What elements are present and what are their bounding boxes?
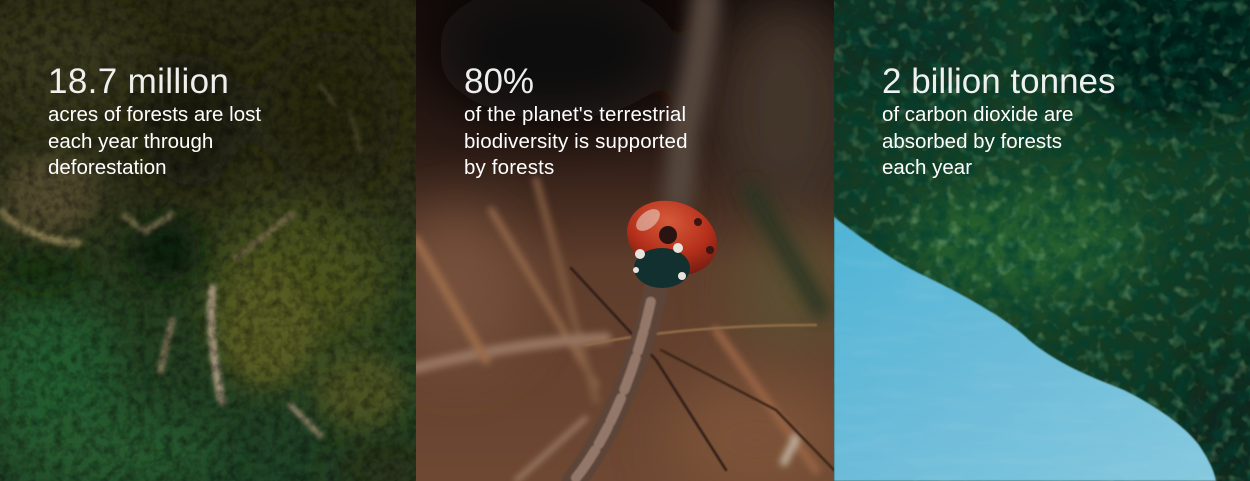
stat text: 18.7 million xyxy=(48,62,261,179)
panel: biodiversity xyxy=(416,0,834,481)
stat caption: of carbon dioxide are xyxy=(882,103,1073,126)
stat caption: biodiversity is supported xyxy=(464,130,688,152)
stat caption xyxy=(464,103,688,179)
stat caption: absorbed by forests xyxy=(882,130,1062,152)
icon: ladybird xyxy=(616,188,728,288)
photo: forest and lake xyxy=(834,0,1250,481)
panel: carbon xyxy=(834,0,1250,481)
stat caption: by forests xyxy=(464,156,554,179)
stat number: 2 billion tonnes xyxy=(882,62,1116,101)
stat number: 18.7 million xyxy=(48,62,229,101)
stat caption: deforestation xyxy=(48,156,167,179)
stat caption xyxy=(48,103,261,179)
stat caption: each year through xyxy=(48,130,213,152)
photo: aerial mountain forest xyxy=(0,0,416,481)
stat number: 80% xyxy=(464,62,534,101)
photo: ladybird on twig xyxy=(416,0,834,481)
stat caption: of the planet's terrestrial xyxy=(464,103,686,126)
lake xyxy=(834,216,1217,481)
stat caption: acres of forests are lost xyxy=(48,103,261,126)
stat text: 2 billion tonnes xyxy=(882,62,1116,179)
panel: deforestation xyxy=(0,0,416,481)
stat caption: each year xyxy=(882,156,972,179)
stat caption xyxy=(882,103,1073,179)
stat text: 80% xyxy=(464,62,688,179)
